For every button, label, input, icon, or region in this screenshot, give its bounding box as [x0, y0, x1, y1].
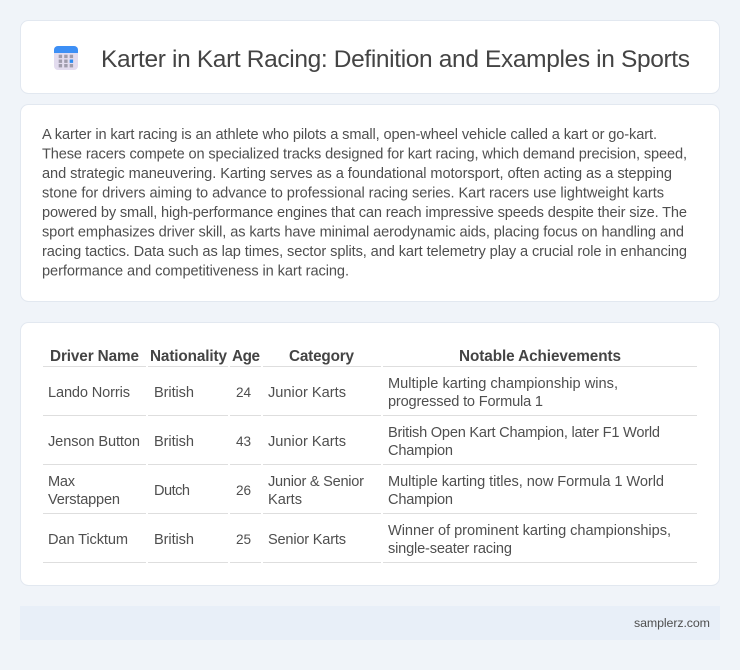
- title: Karter in Kart Racing: Definition and Examples in Sports: [101, 46, 690, 73]
- table header row: Nationality: [150, 348, 227, 365]
- table row: Dan Ticktum: British: [154, 532, 194, 548]
- table row: Lando Norris: Multiple karting championship wins,: [388, 376, 618, 392]
- table row: Jenson Button: Champion: [388, 443, 453, 459]
- table header row: Category: [289, 348, 354, 365]
- text block: description paragraph: stone for drivers aiming to advance to professional racing series. Kart racers use lightweight karts: [42, 186, 664, 202]
- table row: Max Verstappen: Multiple karting titles, now Formula 1 World: [388, 474, 664, 490]
- table row: Max Verstappen: Junior & Senior: [268, 474, 364, 490]
- table row: Dan Ticktum: single-seater racing: [388, 541, 512, 557]
- table header row: Driver Name: [50, 348, 139, 365]
- icon: calendar: [54, 46, 78, 70]
- table row: Max Verstappen: [48, 474, 664, 508]
- table header row: [50, 348, 621, 365]
- table row: Max Verstappen: Verstappen: [48, 492, 120, 508]
- text block: description paragraph: [42, 127, 687, 280]
- table row: Lando Norris: Lando Norris: [48, 385, 130, 401]
- table row: Dan Ticktum: Senior Karts: [268, 532, 346, 548]
- panel: title header: [20, 20, 720, 94]
- table row: Jenson Button: 43: [236, 434, 251, 449]
- table header row: Age: [232, 348, 260, 365]
- table row: Jenson Button: [48, 425, 660, 459]
- table row: Dan Ticktum: Winner of prominent karting championships,: [388, 523, 671, 539]
- table row: Lando Norris: British: [154, 385, 194, 401]
- text block: description paragraph: racing tactics. Data such as lap times, sector splits, and kart telemetry play a crucial role in enhancing: [42, 244, 687, 260]
- text block: description paragraph: powered by small, high-performance engines that can reach impressive speeds despite their size. The: [42, 205, 687, 221]
- table row: Jenson Button: British Open Kart Champion, later F1 World: [388, 425, 660, 441]
- text block: description paragraph: sport emphasizes driver skill, as karts have minimal aerodynamic aids, placing focus on handling and: [42, 224, 684, 240]
- table row: Max Verstappen: Max: [48, 474, 76, 490]
- footer: [20, 606, 720, 640]
- table row: Jenson Button: Junior Karts: [268, 434, 346, 450]
- table row: Lando Norris: [48, 376, 618, 410]
- table row: Max Verstappen: Dutch: [154, 483, 190, 499]
- table row: Jenson Button: Jenson Button: [48, 434, 140, 450]
- table row: Jenson Button: British: [154, 434, 194, 450]
- table row: Lando Norris: 24: [236, 385, 251, 400]
- table row: Max Verstappen: Karts: [268, 492, 302, 508]
- text block: description paragraph: These racers compete on specialized tracks designed for kart racing, which demand precision, speed,: [42, 146, 687, 162]
- table row: Dan Ticktum: 25: [236, 532, 251, 547]
- text block: description paragraph: A karter in kart racing is an athlete who pilots a small, open-wheel vehicle called a kart or go-kart.: [42, 127, 657, 143]
- table row: Max Verstappen: 26: [236, 483, 251, 498]
- table row: Lando Norris: Junior Karts: [268, 385, 346, 401]
- text block: description paragraph: and strategic maneuvering. Karting serves as a foundational motorsport, often acting as a stepping: [42, 166, 672, 182]
- table row: Dan Ticktum: [48, 523, 671, 557]
- footer source text: samplerz.com: [634, 616, 710, 630]
- panel: drivers table: [20, 322, 720, 586]
- table header row: Notable Achievements: [459, 348, 621, 365]
- table row: Lando Norris: progressed to Formula 1: [388, 394, 543, 410]
- panel: description: [20, 104, 720, 302]
- table row: Max Verstappen: Champion: [388, 492, 453, 508]
- text block: description paragraph: performance and competitiveness in kart racing.: [42, 264, 349, 280]
- table row: Dan Ticktum: Dan Ticktum: [48, 532, 128, 548]
